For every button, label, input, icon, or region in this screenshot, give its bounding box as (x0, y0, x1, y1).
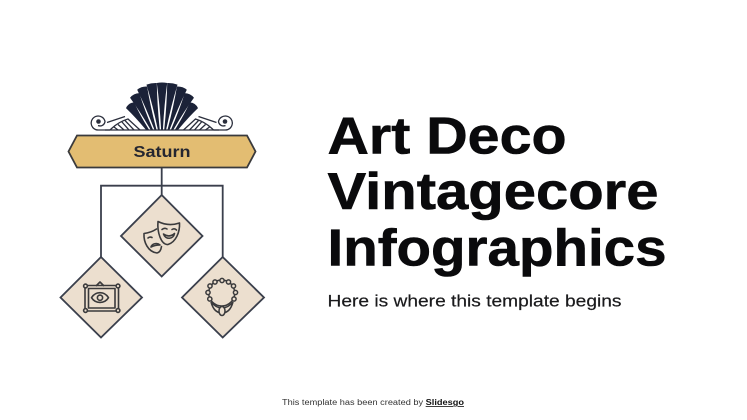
diamond: framed eye (60, 257, 142, 338)
connector lines (101, 167, 223, 257)
banner: Saturn: Saturn (134, 144, 190, 161)
icon: art deco fan (126, 82, 198, 130)
footer credit: This template has been created by Slidesgo (282, 398, 464, 407)
icon: left scroll ornament (91, 116, 140, 130)
title: Art Deco (328, 107, 566, 165)
diamond: bead necklace (182, 257, 264, 338)
infographic: Saturn hierarchy (60, 82, 264, 338)
banner: Saturn (68, 136, 256, 168)
ornament base line (105, 129, 219, 131)
diamond: theatre masks (121, 195, 202, 276)
icon: right scroll ornament (184, 116, 232, 130)
icon: framed eye (84, 282, 120, 312)
subtitle: Here is where this template begins (328, 292, 622, 310)
icon: theatre masks (144, 222, 180, 253)
title: Infographics (328, 220, 666, 278)
title: Vintagecore (328, 163, 658, 221)
icon: bead necklace (206, 278, 238, 316)
